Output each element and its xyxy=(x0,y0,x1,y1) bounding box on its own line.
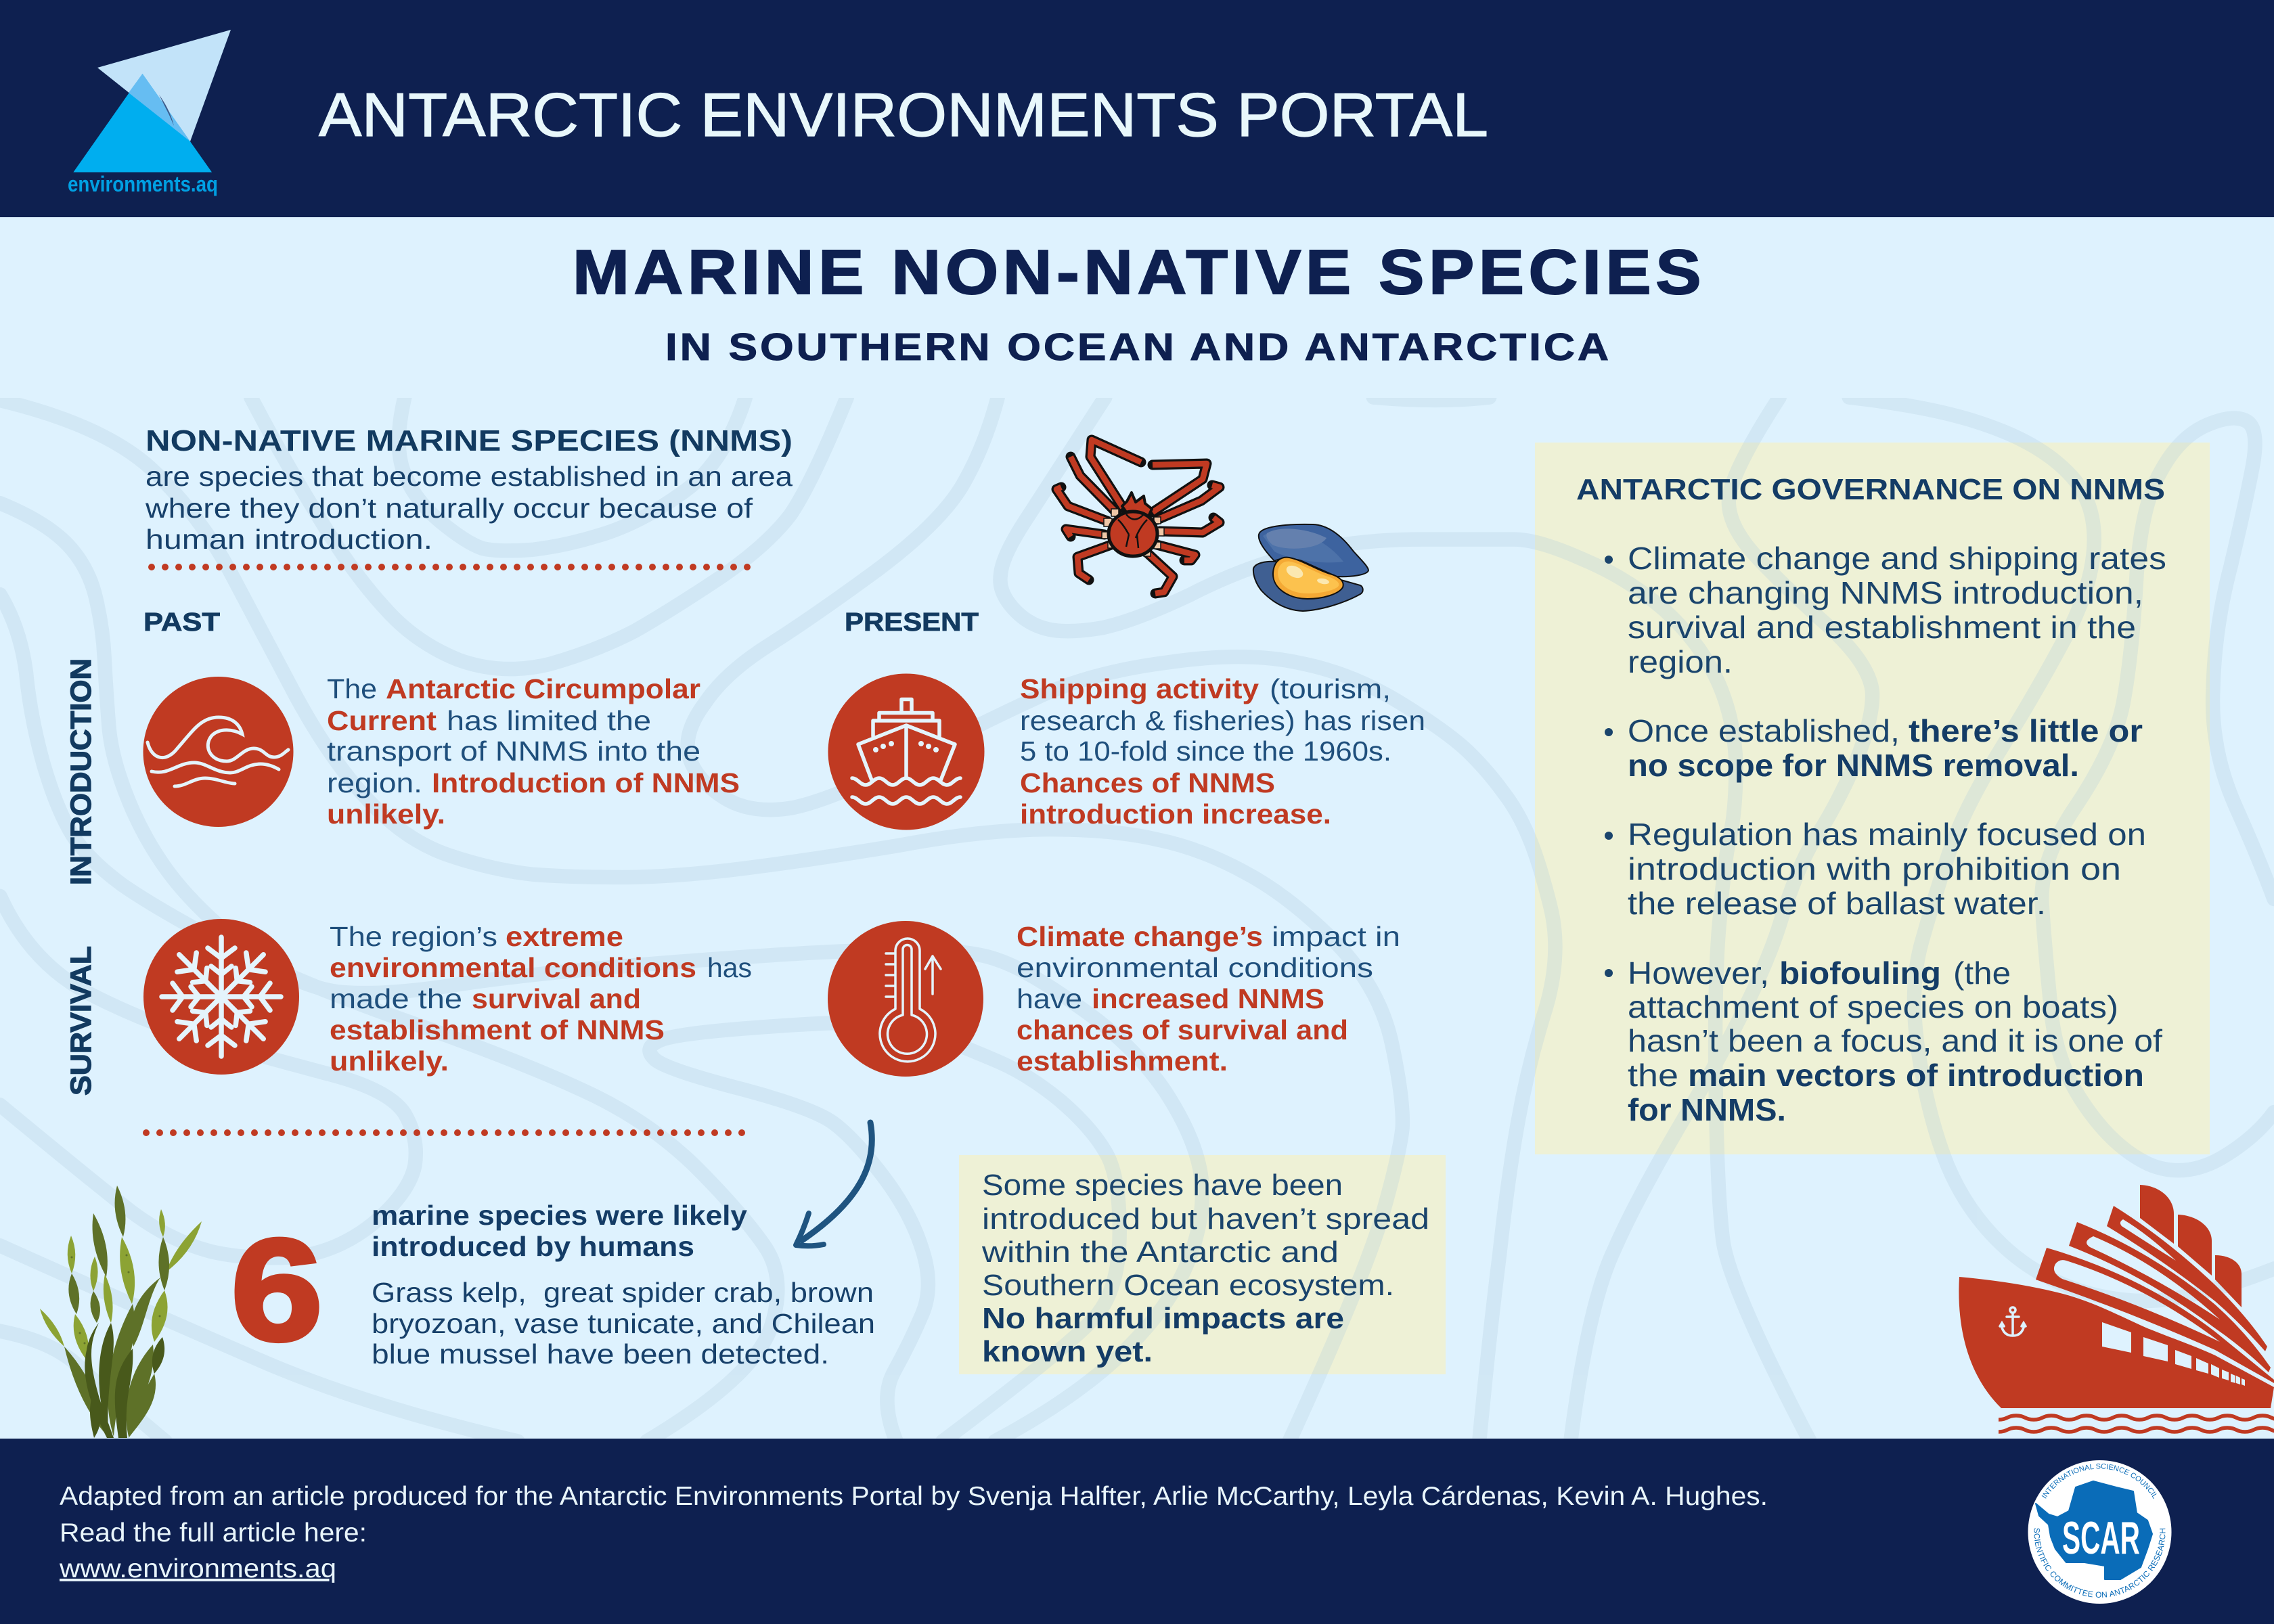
text: present survival xyxy=(1017,921,1400,1077)
text: present survival: chances of survival and xyxy=(1017,1014,1348,1045)
text: present survival: Climate change’s xyxy=(1017,921,1263,952)
bullet 2: Once established, xyxy=(1628,713,1900,748)
bullet 4: the xyxy=(1628,1058,1678,1093)
illustration: cruise ship xyxy=(1959,1185,2274,1432)
footer band xyxy=(0,1439,2274,1624)
bullet 4: main vectors of introduction xyxy=(1688,1058,2144,1093)
definition text block: human introduction. xyxy=(146,524,432,555)
text: present introduction: Chances of NNMS xyxy=(1020,767,1275,798)
bullet 4: biofouling xyxy=(1779,955,1941,991)
main title: MARINE NON-NATIVE SPECIES xyxy=(573,237,1706,307)
text: present survival: establishment. xyxy=(1017,1045,1228,1077)
illustration: spider crab xyxy=(1056,440,1220,593)
text: present survival: increased NNMS xyxy=(1092,983,1324,1014)
text: past introduction: Introduction of NNMS xyxy=(432,767,740,798)
bullet 4 xyxy=(1605,955,2162,1127)
logo: SCAR: INTERNATIONAL SCIENCE COUNCIL xyxy=(2041,1463,2156,1499)
bullet 3: Regulation has mainly focused on xyxy=(1628,817,2146,852)
header band xyxy=(0,0,2274,217)
background contour lines xyxy=(0,397,2274,1441)
text: governance panel xyxy=(1576,473,2166,1127)
text: present introduction xyxy=(1020,673,1425,830)
bullet 4: However, xyxy=(1628,955,1769,991)
footer credits: Adapted from an article produced for the Antarctic Environments Portal by Svenja Halfter, Arlie McCarthy, Leyla Cárdenas, Kevin A. Hughes. xyxy=(60,1482,1768,1511)
text: present survival: environmental conditions xyxy=(1017,952,1373,983)
logo: SCAR: SCIENTIFIC COMMITTEE ON ANTARCTIC RESEARCH xyxy=(2034,1528,2166,1598)
bullet 1: are changing NNMS introduction, xyxy=(1628,575,2143,610)
bullet 4: hasn’t been a focus, and it is one of xyxy=(1628,1023,2162,1058)
text: past survival: The region’s xyxy=(330,921,497,952)
text: past introduction: has limited the xyxy=(447,705,651,736)
bullet 2: no scope for NNMS removal. xyxy=(1628,748,2079,783)
panel: impacts box background xyxy=(959,1155,1446,1374)
column heading: present: PRESENT xyxy=(845,608,979,637)
text: impacts callout: Some species have been xyxy=(982,1169,1343,1202)
text: past survival: environmental conditions xyxy=(330,952,696,983)
illustration: blue mussel xyxy=(1253,524,1368,611)
logo: environments.aq xyxy=(68,30,231,196)
definition text block: where they don’t naturally occur because of xyxy=(145,493,753,524)
definition text block: NON-NATIVE MARINE SPECIES (NNMS) xyxy=(146,424,793,457)
water ripples xyxy=(1999,1416,2274,1432)
text: past introduction xyxy=(327,673,740,830)
bullet 4: (the xyxy=(1953,955,2011,991)
header title: ANTARCTIC ENVIRONMENTS PORTAL xyxy=(319,81,1488,150)
row label: introduction: INTRODUCTION xyxy=(65,658,97,885)
icon: ocean wave xyxy=(143,677,294,827)
text: six species: bryozoan, vase tunicate, and Chilean xyxy=(372,1308,875,1339)
text: past introduction: transport of NNMS into the xyxy=(327,736,700,767)
column heading: past: PAST xyxy=(143,608,220,637)
text: six species: Grass kelp, great spider crab, brown xyxy=(372,1277,874,1308)
illustration: grass kelp xyxy=(40,1186,202,1438)
bullet 4: attachment of species on boats) xyxy=(1628,989,2118,1024)
text: past survival: has xyxy=(707,952,752,983)
logo: SCAR: SCAR xyxy=(2062,1512,2140,1564)
text: impacts callout: introduced but haven’t spread xyxy=(982,1202,1429,1236)
text: present introduction: introduction increase. xyxy=(1020,798,1331,830)
text: past survival: establishment of NNMS xyxy=(330,1014,665,1045)
text: present survival: have xyxy=(1017,983,1082,1014)
text: past survival: made the xyxy=(330,983,462,1014)
text: six species: marine species were likely xyxy=(372,1200,747,1231)
icon: ship xyxy=(828,674,984,830)
text: present introduction: 5 to 10-fold since the 1960s. xyxy=(1020,736,1391,767)
text: six species: introduced by humans xyxy=(372,1231,694,1262)
text: past introduction: unlikely. xyxy=(327,798,445,830)
bullet 3: introduction with prohibition on xyxy=(1628,851,2121,886)
funnels xyxy=(2140,1185,2242,1307)
icon: thermometer xyxy=(828,921,983,1077)
text: present introduction: Shipping activity xyxy=(1020,673,1259,704)
footer credits: Read the full article here: xyxy=(60,1518,367,1548)
text: past introduction: The xyxy=(327,673,377,704)
decks xyxy=(2036,1206,2274,1383)
arrow xyxy=(796,1123,872,1246)
definition text block xyxy=(145,424,793,555)
bullet 4: for NNMS. xyxy=(1628,1092,1786,1127)
big number 6: 6 xyxy=(231,1209,323,1371)
text: impacts callout: within the Antarctic and xyxy=(981,1236,1339,1269)
text: past introduction: Antarctic Circumpolar xyxy=(386,673,700,704)
text: present introduction: research & fisheries) has risen xyxy=(1020,705,1425,736)
panel: governance box background xyxy=(1535,443,2210,1154)
text: past introduction: Current xyxy=(327,705,437,736)
anchor xyxy=(2000,1307,2026,1336)
logo: environments.aq: environments.aq xyxy=(68,172,218,196)
bullet 2 xyxy=(1605,713,2143,783)
definition text block: are species that become established in an area xyxy=(146,461,793,492)
text: past survival: unlikely. xyxy=(330,1045,449,1077)
governance heading: ANTARCTIC GOVERNANCE ON NNMS xyxy=(1576,473,2165,506)
footer credits: www.environments.aq xyxy=(59,1554,336,1583)
text: impacts callout: known yet. xyxy=(982,1335,1153,1368)
logo: SCAR xyxy=(2028,1460,2171,1604)
text: past introduction: region. xyxy=(327,767,422,798)
icon: snowflake xyxy=(143,919,299,1075)
hull xyxy=(1959,1277,2274,1408)
text: past survival xyxy=(330,921,752,1077)
footer credits xyxy=(59,1482,1768,1583)
text: past survival: extreme xyxy=(506,921,623,952)
text: impacts callout xyxy=(981,1169,1429,1368)
bullet 2: there’s little or xyxy=(1909,713,2143,748)
text: present survival: impact in xyxy=(1272,921,1400,952)
text: six species: blue mussel have been detected. xyxy=(372,1338,829,1370)
bullet 3 xyxy=(1605,817,2146,921)
subtitle: IN SOUTHERN OCEAN AND ANTARCTICA xyxy=(665,325,1611,369)
row label: survival: SURVIVAL xyxy=(65,946,97,1096)
bullet 1: survival and establishment in the xyxy=(1628,610,2136,645)
text: impacts callout: No harmful impacts are xyxy=(982,1302,1344,1335)
text: present introduction: (tourism, xyxy=(1270,673,1391,704)
bullet 1: region. xyxy=(1628,644,1733,679)
bullet 3: the release of ballast water. xyxy=(1628,886,2046,921)
bullet 1: Climate change and shipping rates xyxy=(1628,541,2166,576)
text: impacts callout: Southern Ocean ecosystem. xyxy=(982,1269,1394,1302)
text: past survival: survival and xyxy=(472,983,641,1014)
bullet 1 xyxy=(1605,541,2166,679)
text: six species xyxy=(372,1200,875,1370)
